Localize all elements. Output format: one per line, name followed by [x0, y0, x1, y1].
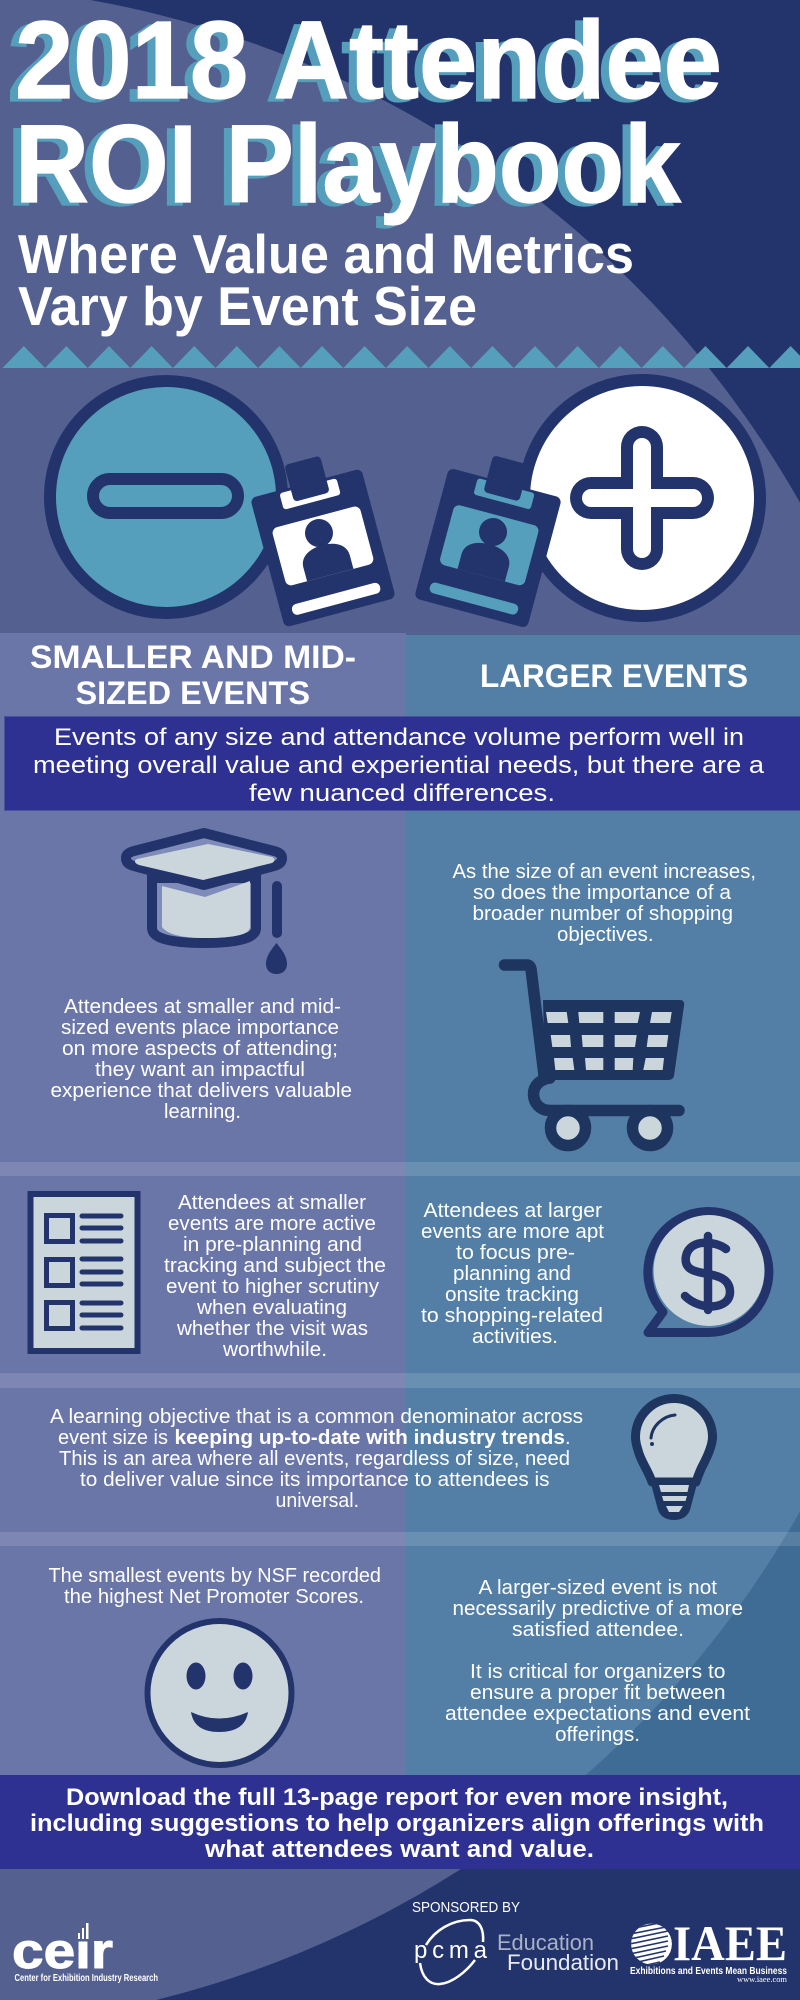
call to action band [0, 1775, 800, 1869]
logo: IAEE: IAEE [673, 1915, 787, 1971]
text: smallest events NPS: the highest Net Promoter Scores. [64, 1586, 364, 1608]
title: 2018 Attendee [15, 0, 722, 122]
text: larger event satisfaction: necessarily predictive of a more [452, 1598, 743, 1620]
text: common learning objective [50, 1406, 583, 1512]
icon: graduation cap [126, 833, 287, 974]
text: common learning objective: to deliver value since its importance to attendees is [80, 1469, 550, 1491]
icon: right badge [414, 445, 568, 628]
logo: IAEE: www.iaee.com [737, 1975, 788, 1984]
logo: pcma education foundation [414, 1920, 619, 1984]
text: larger events shopping objectives: objectives. [557, 924, 654, 946]
text: larger event satisfaction: A larger-sized event is not [478, 1577, 717, 1599]
text: larger events shopping objectives: so does the importance of a [473, 882, 732, 904]
text: common learning objective: universal. [276, 1490, 359, 1512]
title [15, 0, 722, 226]
text: larger events shopping objectives [452, 861, 756, 946]
intro band [4, 716, 800, 810]
section separators [0, 1162, 800, 1546]
text: larger event satisfaction: satisfied attendee. [512, 1619, 684, 1641]
text: larger events pre-planning: to focus pre- [456, 1242, 575, 1264]
text: larger events pre-planning: to shopping-related [421, 1305, 603, 1327]
heading: smaller and mid-sized events: SMALLER AND MID- [30, 639, 356, 675]
text: larger events pre-planning: activities. [472, 1326, 558, 1348]
subtitle [18, 223, 634, 337]
text: larger events pre-planning: onsite tracking [445, 1284, 579, 1306]
panel: larger events column [406, 635, 800, 1775]
logo: pcma education foundation: Education [497, 1930, 594, 1955]
logo: IAEE [630, 1924, 787, 1982]
icon: smiley face [148, 1621, 292, 1765]
sponsored by label: SPONSORED BY [412, 1899, 520, 1916]
panel: smaller events column [0, 633, 406, 1775]
text: smaller events pre-planning: whether the visit was [176, 1318, 368, 1340]
text: smaller events pre-planning: Attendees at smaller [178, 1192, 366, 1214]
triangle divider [2, 346, 800, 368]
text: larger events pre-planning: Attendees at larger [424, 1200, 602, 1222]
text: smaller events learning: Attendees at smaller and mid- [64, 996, 341, 1018]
logo: ceir: Center for Exhibition Industry Research [14, 1973, 158, 1984]
text: common learning objective: keeping up-to-date with industry trends [174, 1427, 565, 1449]
text: larger events pre-planning: planning and [453, 1263, 571, 1285]
text: common learning objective: event size is [58, 1427, 168, 1449]
icon: minus circle [50, 381, 282, 613]
call to action band: Download the full 13-page report for even more insight, [66, 1784, 728, 1811]
text: smaller events pre-planning: when evaluating [196, 1297, 347, 1319]
text: larger event satisfaction: attendee expectations and event [445, 1703, 750, 1725]
text: larger events pre-planning: events are more apt [421, 1221, 604, 1243]
text: larger events shopping objectives: broader number of shopping [472, 903, 733, 925]
text: smaller events pre-planning: in pre-planning and [183, 1234, 362, 1256]
subtitle: Where Value and Metrics [18, 223, 634, 285]
text: smaller events pre-planning: tracking and subject the [164, 1255, 386, 1277]
text: smaller events learning [50, 996, 352, 1123]
subtitle: Vary by Event Size [18, 275, 477, 337]
text: smaller events learning: they want an impactful [95, 1059, 305, 1081]
text: larger events pre-planning [421, 1200, 604, 1348]
title: ROI Playbook [15, 103, 682, 226]
call to action band: what attendees want and value. [204, 1836, 594, 1863]
icon: shopping cart [504, 965, 684, 1146]
icon: light bulb [636, 1398, 712, 1520]
icon: checklist [30, 1194, 138, 1351]
text: larger events shopping objectives: As the size of an event increases, [452, 861, 756, 883]
text: common learning objective: A learning objective that is a common denominator across [50, 1406, 583, 1428]
text: smallest events NPS [48, 1565, 381, 1608]
icon: left badge [244, 446, 396, 628]
logo: ceir [12, 1923, 158, 1984]
text: smaller events learning: sized events place importance [61, 1017, 339, 1039]
intro band: Events of any size and attendance volume perform well in [54, 724, 744, 751]
text: larger event satisfaction [445, 1577, 750, 1746]
text: larger event satisfaction: ensure a proper fit between [470, 1682, 726, 1704]
icon: dollar speech bubble [648, 1212, 769, 1333]
icon: plus circle [524, 380, 760, 616]
intro band: meeting overall value and experiential needs, but there are a [33, 752, 765, 779]
heading: smaller and mid-sized events [30, 639, 356, 711]
intro band: few nuanced differences. [249, 780, 555, 807]
logo: pcma education foundation: Foundation [507, 1950, 619, 1975]
call to action band: including suggestions to help organizers align offerings with [30, 1810, 764, 1837]
text: smaller events pre-planning: events are more active [168, 1213, 376, 1235]
text: smallest events NPS: The smallest events by NSF recorded [48, 1565, 381, 1587]
heading: smaller and mid-sized events: SIZED EVENTS [76, 675, 310, 711]
text: smaller events learning: on more aspects of attending; [62, 1038, 338, 1060]
text: common learning objective: . [565, 1427, 571, 1449]
text: smaller events pre-planning [164, 1192, 386, 1361]
text: larger event satisfaction: offerings. [555, 1724, 640, 1746]
heading: larger events: LARGER EVENTS [480, 658, 748, 694]
text: smaller events pre-planning: event to higher scrutiny [166, 1276, 379, 1298]
logo: pcma education foundation: pcma [414, 1937, 488, 1964]
text: larger event satisfaction: It is critical for organizers to [470, 1661, 726, 1683]
text: common learning objective: This is an area where all events, regardless of size, need [59, 1448, 570, 1470]
text: smaller events pre-planning: worthwhile. [222, 1339, 327, 1361]
text: smaller events learning: learning. [164, 1101, 241, 1123]
text: smaller events learning: experience that delivers valuable [50, 1080, 352, 1102]
logo: ceir: ceir [12, 1923, 113, 1979]
